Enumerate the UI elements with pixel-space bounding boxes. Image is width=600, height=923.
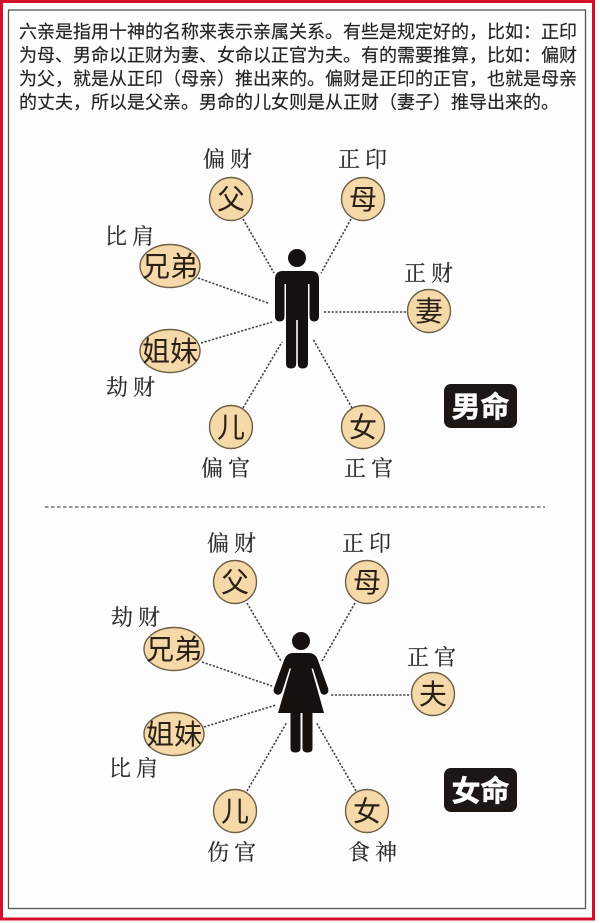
intro text block xyxy=(19,18,577,114)
badge: 女命 xyxy=(444,768,517,812)
node: 姐妹 xyxy=(140,330,200,372)
label: 劫财: 劫财 xyxy=(106,375,160,400)
node: 兄弟 xyxy=(144,628,204,670)
label: 偏财: 偏财 xyxy=(203,147,257,172)
label: 偏官: 偏官 xyxy=(201,456,255,481)
label: 正财: 正财 xyxy=(404,261,458,286)
node: 女 xyxy=(346,790,388,832)
node: 儿: 儿 xyxy=(217,412,245,443)
connector lines: male xyxy=(198,219,407,408)
label: 食神: 食神 xyxy=(348,840,402,865)
label: 劫财: 劫财 xyxy=(111,605,165,630)
node: 姐妹 xyxy=(144,712,204,756)
connector lines: female xyxy=(202,603,410,791)
node: 姐妹: 姐妹 xyxy=(146,719,202,750)
node: 姐妹: 姐妹 xyxy=(142,336,198,367)
node: 兄弟: 兄弟 xyxy=(142,251,198,282)
node: 儿 xyxy=(214,790,256,832)
divider xyxy=(45,506,545,508)
node: 兄弟: 兄弟 xyxy=(146,634,202,665)
node: 儿: 儿 xyxy=(221,796,249,827)
node: 父 xyxy=(210,178,252,220)
node: 母: 母 xyxy=(349,184,377,215)
node: 父: 父 xyxy=(221,567,249,598)
label: 正印: 正印 xyxy=(338,147,392,172)
node: 母 xyxy=(342,178,384,220)
label: 比肩: 比肩 xyxy=(109,756,163,781)
node: 父 xyxy=(214,560,256,604)
badge: 男命: 男命 xyxy=(451,390,510,424)
label: 比肩: 比肩 xyxy=(105,224,159,249)
node: 夫 xyxy=(412,672,454,716)
node: 夫: 夫 xyxy=(419,679,447,710)
intro text block: 六亲是指用十神的名称来表示亲属关系。有些是规定好的，比如：正印 xyxy=(19,18,577,44)
node: 父: 父 xyxy=(217,184,245,215)
intro text block: 为母、男命以正财为妻、女命以正官为夫。有的需要推算，比如：偏财 xyxy=(19,42,577,68)
node: 母 xyxy=(346,560,388,604)
badge: 男命 xyxy=(444,384,517,428)
node: 儿 xyxy=(210,406,252,448)
label: 偏财: 偏财 xyxy=(207,531,261,556)
node: 女 xyxy=(342,406,384,448)
intro text block: 为父，就是从正印（母亲）推出来的。偏财是正印的正官，也就是母亲 xyxy=(19,65,577,91)
label: 正官: 正官 xyxy=(407,645,461,670)
node: 女: 女 xyxy=(353,796,381,827)
node: 女: 女 xyxy=(349,412,377,443)
icon: woman figure xyxy=(274,632,328,752)
intro text block: 的丈夫，所以是父亲。男命的儿女则是从正财（妻子）推导出来的。 xyxy=(19,88,559,114)
node: 兄弟 xyxy=(140,244,200,288)
panel: female chart xyxy=(109,531,517,865)
node: 母: 母 xyxy=(353,567,381,598)
node: 妻: 妻 xyxy=(415,296,443,327)
node: 妻 xyxy=(408,290,450,332)
icon: man figure xyxy=(275,249,319,368)
badge: 女命: 女命 xyxy=(451,774,510,808)
panel: male chart xyxy=(105,147,517,481)
label: 正官: 正官 xyxy=(344,456,398,481)
label: 伤官: 伤官 xyxy=(207,840,261,865)
label: 正印: 正印 xyxy=(342,531,396,556)
